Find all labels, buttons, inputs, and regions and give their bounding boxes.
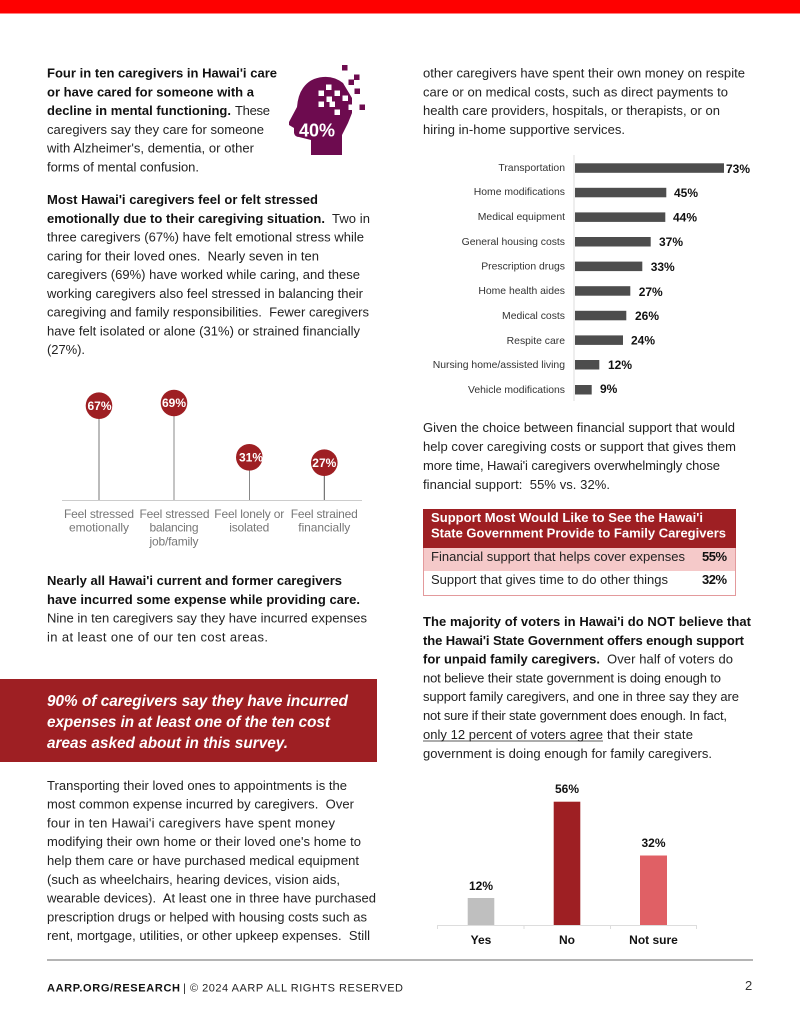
bar: Prescription drugs 33% <box>481 260 675 274</box>
footer <box>47 960 753 994</box>
table: support most would like: 32% <box>702 572 727 587</box>
bar: Medical costs 26% <box>502 309 659 323</box>
lollipop: 27% strained financially <box>291 449 358 534</box>
text block: voters paragraph: not believe their state government is doing enough to <box>423 670 721 685</box>
bar: Nursing home/assisted living 12%: Nursing home/assisted living <box>433 360 565 371</box>
lollipop: 31% lonely or isolated: isolated <box>229 520 269 534</box>
text block: mental decline intro: Four in ten caregivers in Hawai'i care <box>47 66 277 80</box>
text block: expenses paragraph <box>47 573 368 644</box>
text block: stress paragraph: caregiving and family responsibilities. Fewer caregivers <box>47 304 370 320</box>
text block: transportation paragraph <box>46 778 376 943</box>
callout: 90% of caregivers: areas asked about in this survey. <box>47 735 288 752</box>
text block: voters paragraph <box>423 614 752 761</box>
text block: financial support choice: Given the choice between financial support that would <box>423 420 735 435</box>
lollipop chart: feelings of caregivers <box>62 390 362 548</box>
bar: Transportation 73%: Transportation <box>498 163 565 174</box>
lollipop: 69% stressed balancing job/family: balancing <box>150 520 198 534</box>
text block: stress paragraph <box>46 192 370 357</box>
lollipop: 31% lonely or isolated: Feel lonely or <box>214 507 284 521</box>
text block: expenses paragraph: have incurred some expense while providing care. <box>47 592 360 607</box>
footer: 2 <box>745 978 752 993</box>
column chart: voter opinion <box>438 782 696 947</box>
text block: transportation paragraph: wearable devices). At least one in three have purchased <box>46 890 376 906</box>
lollipop: 31% lonely or isolated <box>214 444 284 534</box>
lollipop: 69% stressed balancing job/family: Feel stressed <box>140 507 210 521</box>
column: No 56%: 56% <box>555 782 579 796</box>
text block: mental decline intro: caregivers say they care for someone <box>47 122 264 137</box>
text block: stress paragraph: caring for their loved ones. Nearly seven in ten <box>47 248 319 263</box>
column: Yes 12% <box>468 879 494 947</box>
column: Yes 12%: 12% <box>469 879 493 893</box>
lollipop: 69% stressed balancing job/family: 69% <box>162 396 186 410</box>
top red banner <box>0 0 800 14</box>
icon: head with dissolving pixels, 40%: 40% <box>299 120 335 140</box>
text block: voters paragraph: Over half of voters do <box>607 652 733 666</box>
text block: expenses paragraph: in at least one of our ten cost areas. <box>47 629 268 644</box>
bar: Home modifications 45%: 45% <box>674 186 698 200</box>
lollipop: 67% stressed emotionally: 67% <box>87 399 112 413</box>
lollipop: 31% lonely or isolated: 31% <box>239 450 263 464</box>
text block: financial support choice: help cover caregiving costs or support that gives them <box>423 439 736 454</box>
callout: 90% of caregivers: expenses in at least one of the ten cost <box>47 714 331 731</box>
text block: transportation paragraph: most common expense incurred by caregivers. Over <box>47 796 355 812</box>
text block: stress paragraph: emotionally due to their caregiving situation. <box>47 211 325 226</box>
column: Yes 12%: Yes <box>471 933 492 947</box>
column: Not sure 32%: 32% <box>641 836 666 850</box>
text block: financial support choice: more time, Hawai'i caregivers overwhelmingly chose <box>423 458 720 473</box>
lollipop: 67% stressed emotionally <box>64 392 134 534</box>
text block: stress paragraph: Most Hawai'i caregivers feel or felt stressed <box>47 192 318 207</box>
text block: transportation paragraph: prescription drugs or helped with housing costs such as <box>47 909 368 924</box>
callout: 90% of caregivers: 90% of caregivers say they have incurred <box>47 693 349 710</box>
text block: financial support choice: financial support: 55% vs. 32%. <box>423 477 610 492</box>
bar: Home modifications 45%: Home modifications <box>474 187 565 198</box>
text block: continued expenses paragraph: care or on medical costs, such as direct payments to <box>423 84 728 99</box>
table: support most would like: Support Most Would Like to See the Hawai'i <box>431 510 703 525</box>
bar chart: expense categories <box>433 155 750 401</box>
text block: stress paragraph: have felt isolated or alone (31%) or strained financially <box>47 323 360 338</box>
text block: continued expenses paragraph: hiring in-home supportive services. <box>423 122 625 137</box>
table: support most would like <box>423 509 736 596</box>
bar: Prescription drugs 33%: 33% <box>651 260 675 274</box>
text block: financial support choice <box>423 420 736 492</box>
text block: mental decline intro: These <box>235 103 270 118</box>
bar: Medical equipment 44%: 44% <box>673 210 697 224</box>
bar: Nursing home/assisted living 12% <box>433 358 632 372</box>
bar: Medical equipment 44% <box>478 210 697 224</box>
text block: mental decline intro: forms of mental confusion. <box>47 160 199 174</box>
text block: mental decline intro: or have cared for someone with a <box>47 84 255 99</box>
lollipop: 69% stressed balancing job/family <box>140 390 210 548</box>
bar: General housing costs 37%: 37% <box>659 235 683 249</box>
text block: voters paragraph: only 12 percent of voters agree <box>423 727 603 742</box>
column: No 56% <box>554 782 580 947</box>
text block: transportation paragraph: help them care or have purchased medical equipment <box>47 853 359 868</box>
text block: mental decline intro: decline in mental functioning. <box>47 103 231 118</box>
text block: transportation paragraph: (such as wheelchairs, hearing devices, vision aids, <box>47 872 340 887</box>
bar: Respite care 24% <box>507 334 655 348</box>
table: support most would like: State Government Provide to Family Caregivers <box>431 526 726 540</box>
footer: | © 2024 AARP ALL RIGHTS RESERVED <box>183 982 403 994</box>
text block: voters paragraph: the Hawai'i State Government offers enough support <box>423 633 745 648</box>
bar: Transportation 73%: 73% <box>726 162 750 176</box>
bar: Medical equipment 44%: Medical equipment <box>478 212 565 223</box>
bar: Home health aides 27%: Home health aides <box>478 286 565 297</box>
bar: Nursing home/assisted living 12%: 12% <box>608 358 632 372</box>
column: No 56%: No <box>559 933 575 947</box>
text block: stress paragraph: caregivers (69%) have worked while caring, and these <box>47 267 360 282</box>
text block: voters paragraph: that their state <box>607 727 693 742</box>
text block: stress paragraph: three caregivers (67%) have felt emotional stress while <box>47 230 364 244</box>
text block: stress paragraph: (27%). <box>47 342 85 357</box>
text block: expenses paragraph: Nearly all Hawai'i current and former caregivers <box>47 573 342 588</box>
text block: voters paragraph: for unpaid family caregivers. <box>423 652 600 666</box>
lollipop: 69% stressed balancing job/family: job/family <box>148 534 198 548</box>
table: support most would like: Support that gives time to do other things <box>431 572 668 587</box>
text block: continued expenses paragraph <box>423 66 745 137</box>
bar: Vehicle modifications 9% <box>468 382 618 396</box>
text block: stress paragraph: working caregivers also feel stressed in balancing their <box>46 286 364 301</box>
text block: transportation paragraph: rent, mortgage, utilities, or other upkeep expenses. Still <box>47 928 370 943</box>
column: Not sure 32% <box>629 836 678 947</box>
bar: Respite care 24%: Respite care <box>507 336 565 347</box>
bar: General housing costs 37% <box>462 235 683 249</box>
text block: transportation paragraph: Transporting their loved ones to appointments is the <box>47 778 347 793</box>
text block: voters paragraph: support family caregivers, and one in three say they are <box>423 689 739 704</box>
text block: expenses paragraph: Nine in ten caregivers say they have incurred expenses <box>47 610 368 626</box>
text block: transportation paragraph: four in ten Hawai'i caregivers have spent money <box>47 815 336 830</box>
text block: transportation paragraph: modifying their own home or their loved one's home to <box>47 834 361 849</box>
lollipop: 67% stressed emotionally: emotionally <box>69 520 129 534</box>
bar: Prescription drugs 33%: Prescription drugs <box>481 262 565 272</box>
bar: Transportation 73% <box>498 162 750 176</box>
bar: Vehicle modifications 9%: Vehicle modifications <box>468 385 565 396</box>
bar: Home modifications 45% <box>474 186 698 200</box>
lollipop: 27% strained financially: 27% <box>312 456 337 470</box>
lollipop: 27% strained financially: financially <box>298 520 350 534</box>
text block: voters paragraph: not sure if their state government does enough. In fact, <box>423 708 727 723</box>
column: Not sure 32%: Not sure <box>629 933 678 947</box>
text block: mental decline intro: with Alzheimer's, dementia, or other <box>46 141 255 156</box>
bar: Medical costs 26%: 26% <box>635 309 659 323</box>
text block: stress paragraph: Two in <box>332 211 370 226</box>
lollipop: 27% strained financially: Feel strained <box>291 507 358 521</box>
bar: Vehicle modifications 9%: 9% <box>600 382 618 396</box>
icon: head with dissolving pixels, 40% <box>289 65 365 155</box>
text block: voters paragraph: The majority of voters in Hawai'i do NOT believe that <box>423 614 752 629</box>
footer: AARP.ORG/RESEARCH <box>47 982 180 994</box>
table: support most would like: Financial support that helps cover expenses <box>431 549 686 564</box>
text block: voters paragraph: government is doing enough for family caregivers. <box>423 746 712 761</box>
bar: Home health aides 27%: 27% <box>639 285 663 299</box>
bar: Respite care 24%: 24% <box>631 334 655 348</box>
text block: continued expenses paragraph: other caregivers have spent their own money on respite <box>423 66 745 80</box>
text block: continued expenses paragraph: health care providers, hospitals, or therapists, or on <box>423 103 720 118</box>
callout: 90% of caregivers <box>0 679 377 762</box>
lollipop: 67% stressed emotionally: Feel stressed <box>64 507 134 521</box>
bar: Home health aides 27% <box>478 285 663 299</box>
bar: General housing costs 37%: General housing costs <box>462 237 565 248</box>
bar: Medical costs 26%: Medical costs <box>502 311 565 322</box>
text block: mental decline intro <box>46 66 277 174</box>
table: support most would like: 55% <box>702 549 727 564</box>
